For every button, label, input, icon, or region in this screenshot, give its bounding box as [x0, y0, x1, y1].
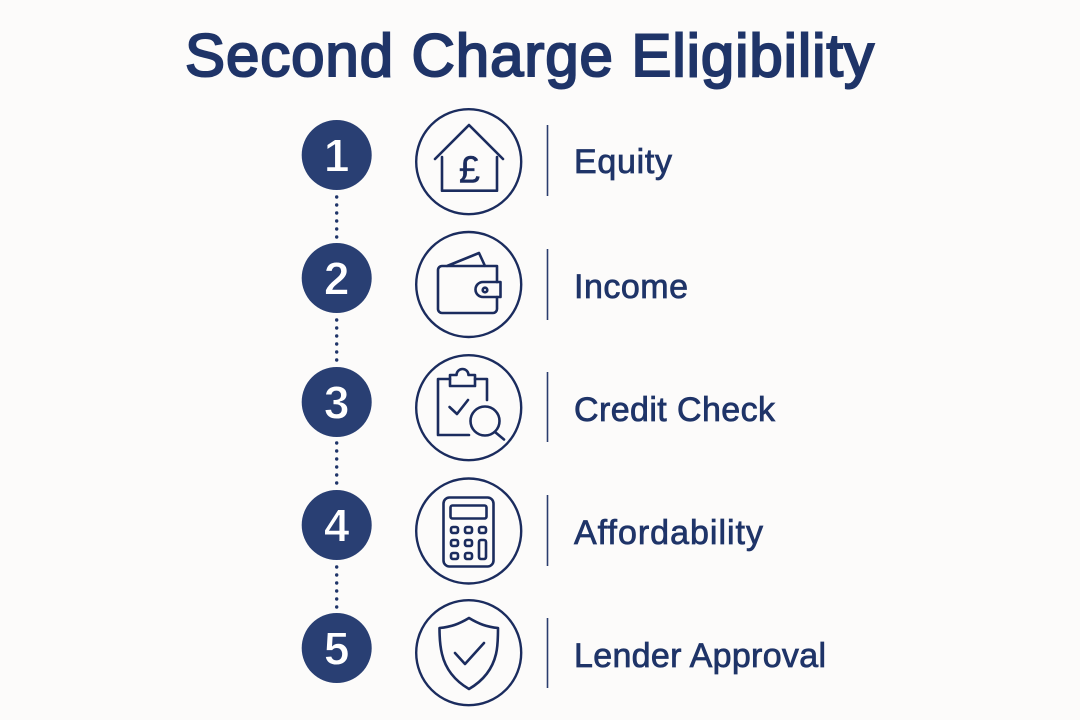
- label: Affordability: Affordability: [574, 514, 763, 552]
- number badge 5: 5: [324, 622, 349, 674]
- number badge 2: 2: [324, 252, 349, 304]
- label: Equity: Equity: [574, 143, 672, 181]
- connector: step 2 to 3: [335, 320, 338, 361]
- number badge 3: 3: [324, 376, 349, 428]
- icon: clipboard with magnifier: [416, 355, 521, 460]
- row 5: lender approval: [302, 600, 826, 705]
- number badge 4: [302, 490, 372, 560]
- number badge 1: [302, 120, 372, 190]
- divider: [546, 125, 548, 196]
- row 2: income: [302, 232, 688, 337]
- icon: shield with check: [416, 600, 521, 705]
- number badge 2: [302, 243, 372, 313]
- number badge 4: 4: [324, 500, 350, 552]
- icon: house with pound sign: [416, 109, 521, 214]
- connector: step 4 to 5: [335, 567, 338, 608]
- number badge 1: 1: [324, 130, 349, 182]
- row 1: equity: [302, 109, 672, 214]
- number badge 3: [302, 367, 372, 437]
- title: Second Charge Eligibility: [185, 22, 874, 89]
- number badge 5: [302, 613, 372, 683]
- icon: calculator: [416, 478, 521, 584]
- row 4: affordability: [302, 478, 763, 584]
- label: Lender Approval: Lender Approval: [574, 637, 826, 675]
- divider: [546, 495, 548, 566]
- divider: [546, 249, 548, 320]
- connector: step 3 to 4: [335, 443, 338, 484]
- icon: wallet: [416, 232, 521, 337]
- divider: [546, 618, 548, 688]
- row 3: credit check: [302, 355, 776, 460]
- connector: step 1 to 2: [335, 197, 338, 238]
- label: Income: Income: [574, 268, 688, 306]
- divider: [546, 372, 548, 442]
- label: Credit Check: Credit Check: [574, 391, 776, 429]
- icon: house with pound sign: £: [459, 150, 480, 192]
